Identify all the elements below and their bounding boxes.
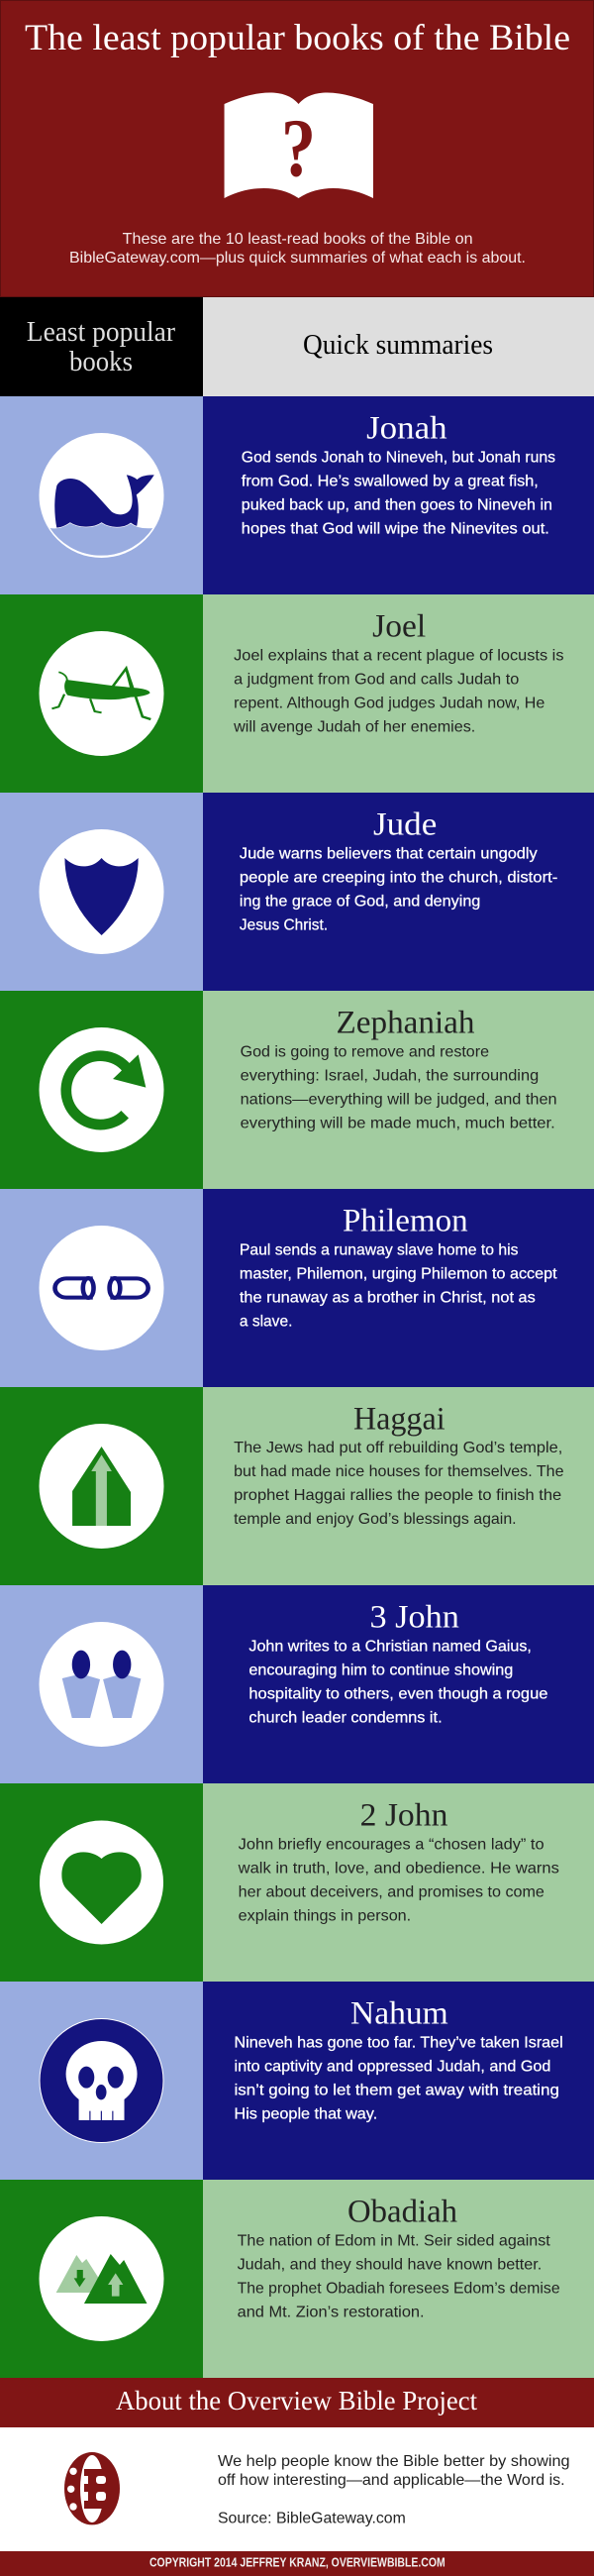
summary: 2 John <box>238 1837 559 1925</box>
summary: Nahum: His people that way. <box>234 2106 377 2123</box>
summary: Zephaniah <box>241 1044 557 1132</box>
icon: shield <box>40 829 164 954</box>
icon: open book with question mark <box>225 92 373 198</box>
summary: Zephaniah: nations—everything will be judged, and then <box>241 1092 557 1109</box>
summary: Nahum: isn’t going to let them get away with treating <box>234 2083 559 2099</box>
icon: open book with question mark: ? <box>281 103 316 194</box>
icon: temple with arrow <box>40 1424 164 1549</box>
summary: Obadiah: Judah, and they should have known better. <box>238 2257 542 2274</box>
about text: Source: BibleGateway.com <box>218 2511 406 2527</box>
intro text: These are the 10 least-read books of the Bible on <box>123 231 473 248</box>
row: Nahum <box>0 1982 594 2180</box>
summary: Zephaniah: God is going to remove and restore <box>241 1044 489 1061</box>
summary: Jonah: from God. He’s swallowed by a great fish, <box>242 474 539 490</box>
summary: Jude: ing the grace of God, and denying <box>240 894 480 911</box>
summary: 2 John: John briefly encourages a “chosen lady” to <box>239 1837 544 1854</box>
summary: Nahum <box>234 2035 563 2123</box>
row: 2 John <box>0 1783 594 1982</box>
summary: 2 John: her about deceivers, and promises to come <box>239 1884 544 1901</box>
heading: about bar <box>0 2378 594 2427</box>
summary: Jude: people are creeping into the church, distort- <box>240 870 557 887</box>
heading: 2 John: 2 John <box>360 1798 447 1834</box>
summary: Nahum: Nineveh has gone too far. They’ve taken Israel <box>234 2035 563 2052</box>
row: Jude <box>0 793 594 991</box>
heading: Haggai: Haggai <box>353 1402 446 1438</box>
summary: Philemon: Paul sends a runaway slave home to his <box>240 1242 519 1259</box>
row: Jonah <box>0 396 594 594</box>
summary: Jonah: God sends Jonah to Nineveh, but Jonah runs <box>242 450 555 467</box>
summary: Philemon <box>240 1242 557 1331</box>
summary: Obadiah: The nation of Edom in Mt. Seir sided against <box>238 2233 550 2250</box>
summary: Philemon: master, Philemon, urging Philemon to accept <box>240 1266 557 1283</box>
summary: 3 John: encouraging him to continue showing <box>248 1663 513 1679</box>
footer: copyright: COPYRIGHT 2014 JEFFREY KRANZ, OVERVIEWBIBLE.COM <box>149 2555 446 2570</box>
summary: Haggai: prophet Haggai rallies the people to finish the <box>234 1487 561 1504</box>
panel: header <box>0 0 594 297</box>
summary: Joel <box>233 648 564 736</box>
summary: Haggai: temple and enjoy God’s blessings again. <box>234 1511 517 1528</box>
heading: Zephaniah: Zephaniah <box>337 1006 475 1041</box>
panel: about <box>0 2427 594 2551</box>
about text <box>218 2453 570 2527</box>
summary: Joel: a judgment from God and calls Judah to <box>234 672 519 689</box>
icon: heart <box>40 1821 163 1944</box>
summary: Joel: repent. Although God judges Judah now, He <box>234 696 544 712</box>
summary: Haggai: but had made nice houses for themselves. The <box>234 1463 564 1480</box>
summary: Jonah <box>242 450 555 538</box>
row: Obadiah <box>0 2180 594 2378</box>
icon: mountains <box>40 2216 164 2341</box>
about text: off how interesting—and applicable—the Word is. <box>218 2472 565 2489</box>
about text: We help people know the Bible better by showing <box>218 2453 570 2470</box>
summary: Haggai: The Jews had put off rebuilding God’s temple, <box>234 1440 562 1456</box>
icon: restore arrow <box>40 1027 164 1152</box>
icon: two people <box>40 1622 164 1747</box>
intro text: BibleGateway.com—plus quick summaries of what each is about. <box>69 250 526 267</box>
heading: Joel: Joel <box>372 609 426 645</box>
summary: Obadiah: and Mt. Zion’s restoration. <box>238 2305 425 2321</box>
column heading: quick summaries <box>203 297 594 396</box>
heading: Jonah: Jonah <box>366 411 447 447</box>
intro text <box>69 231 526 267</box>
summary: Zephaniah: everything: Israel, Judah, the surrounding <box>241 1068 539 1085</box>
heading: Nahum: Nahum <box>350 1996 448 2032</box>
icon: skull <box>40 2019 163 2142</box>
row: Philemon <box>0 1189 594 1387</box>
summary: 2 John: explain things in person. <box>239 1908 411 1925</box>
icon: broken chain <box>40 1226 164 1350</box>
row: 3 John <box>0 1585 594 1783</box>
row: Joel <box>0 594 594 793</box>
summary: Jude: Jesus Christ. <box>240 917 328 934</box>
summary: 3 John: hospitality to others, even though a rogue <box>248 1686 548 1703</box>
heading: Philemon: Philemon <box>343 1204 468 1239</box>
summary: Nahum: into captivity and oppressed Judah, and God <box>234 2059 550 2076</box>
heading: 3 John: 3 John <box>370 1600 459 1636</box>
summary: 3 John: John writes to a Christian named Gaius, <box>248 1639 532 1656</box>
summary: Joel: will avenge Judah of her enemies. <box>233 719 475 736</box>
heading: Jude: Jude <box>373 807 437 843</box>
icon: Overview Bible logo <box>64 2452 120 2524</box>
column heading: least popular books: books <box>69 347 133 377</box>
summary: Philemon: the runaway as a brother in Christ, not as <box>240 1290 536 1307</box>
summary: Jonah: hopes that God will wipe the Ninevites out. <box>242 521 549 538</box>
summary: Obadiah: The prophet Obadiah foresees Edom’s demise <box>238 2281 560 2298</box>
title: The least popular books of the Bible <box>25 18 570 58</box>
summary: Jonah: puked back up, and then goes to Nineveh in <box>242 497 552 514</box>
summary: 3 John: church leader condemns it. <box>248 1710 443 1727</box>
summary: Obadiah <box>238 2233 560 2321</box>
row: Zephaniah <box>0 991 594 1189</box>
heading: Obadiah: Obadiah <box>347 2195 457 2230</box>
column heading: least popular books: Least popular <box>27 317 176 348</box>
column heading: least popular books <box>0 297 203 396</box>
heading: about bar: About the Overview Bible Project <box>116 2386 477 2415</box>
summary: Zephaniah: everything will be made much, much better. <box>241 1116 555 1132</box>
summary: Haggai <box>234 1440 564 1528</box>
row: Haggai <box>0 1387 594 1585</box>
summary: 3 John <box>248 1639 548 1727</box>
summary: 2 John: walk in truth, love, and obedience. He warns <box>238 1861 559 1878</box>
summary: Joel: Joel explains that a recent plague of locusts is <box>234 648 564 665</box>
summary: Philemon: a slave. <box>240 1314 292 1331</box>
footer: copyright <box>0 2551 594 2576</box>
column heading: quick summaries: Quick summaries <box>303 330 493 361</box>
icon: whale <box>40 433 164 558</box>
icon: locust <box>40 631 164 756</box>
summary: Jude <box>240 846 557 934</box>
summary: Jude: Jude warns believers that certain ungodly <box>240 846 538 863</box>
